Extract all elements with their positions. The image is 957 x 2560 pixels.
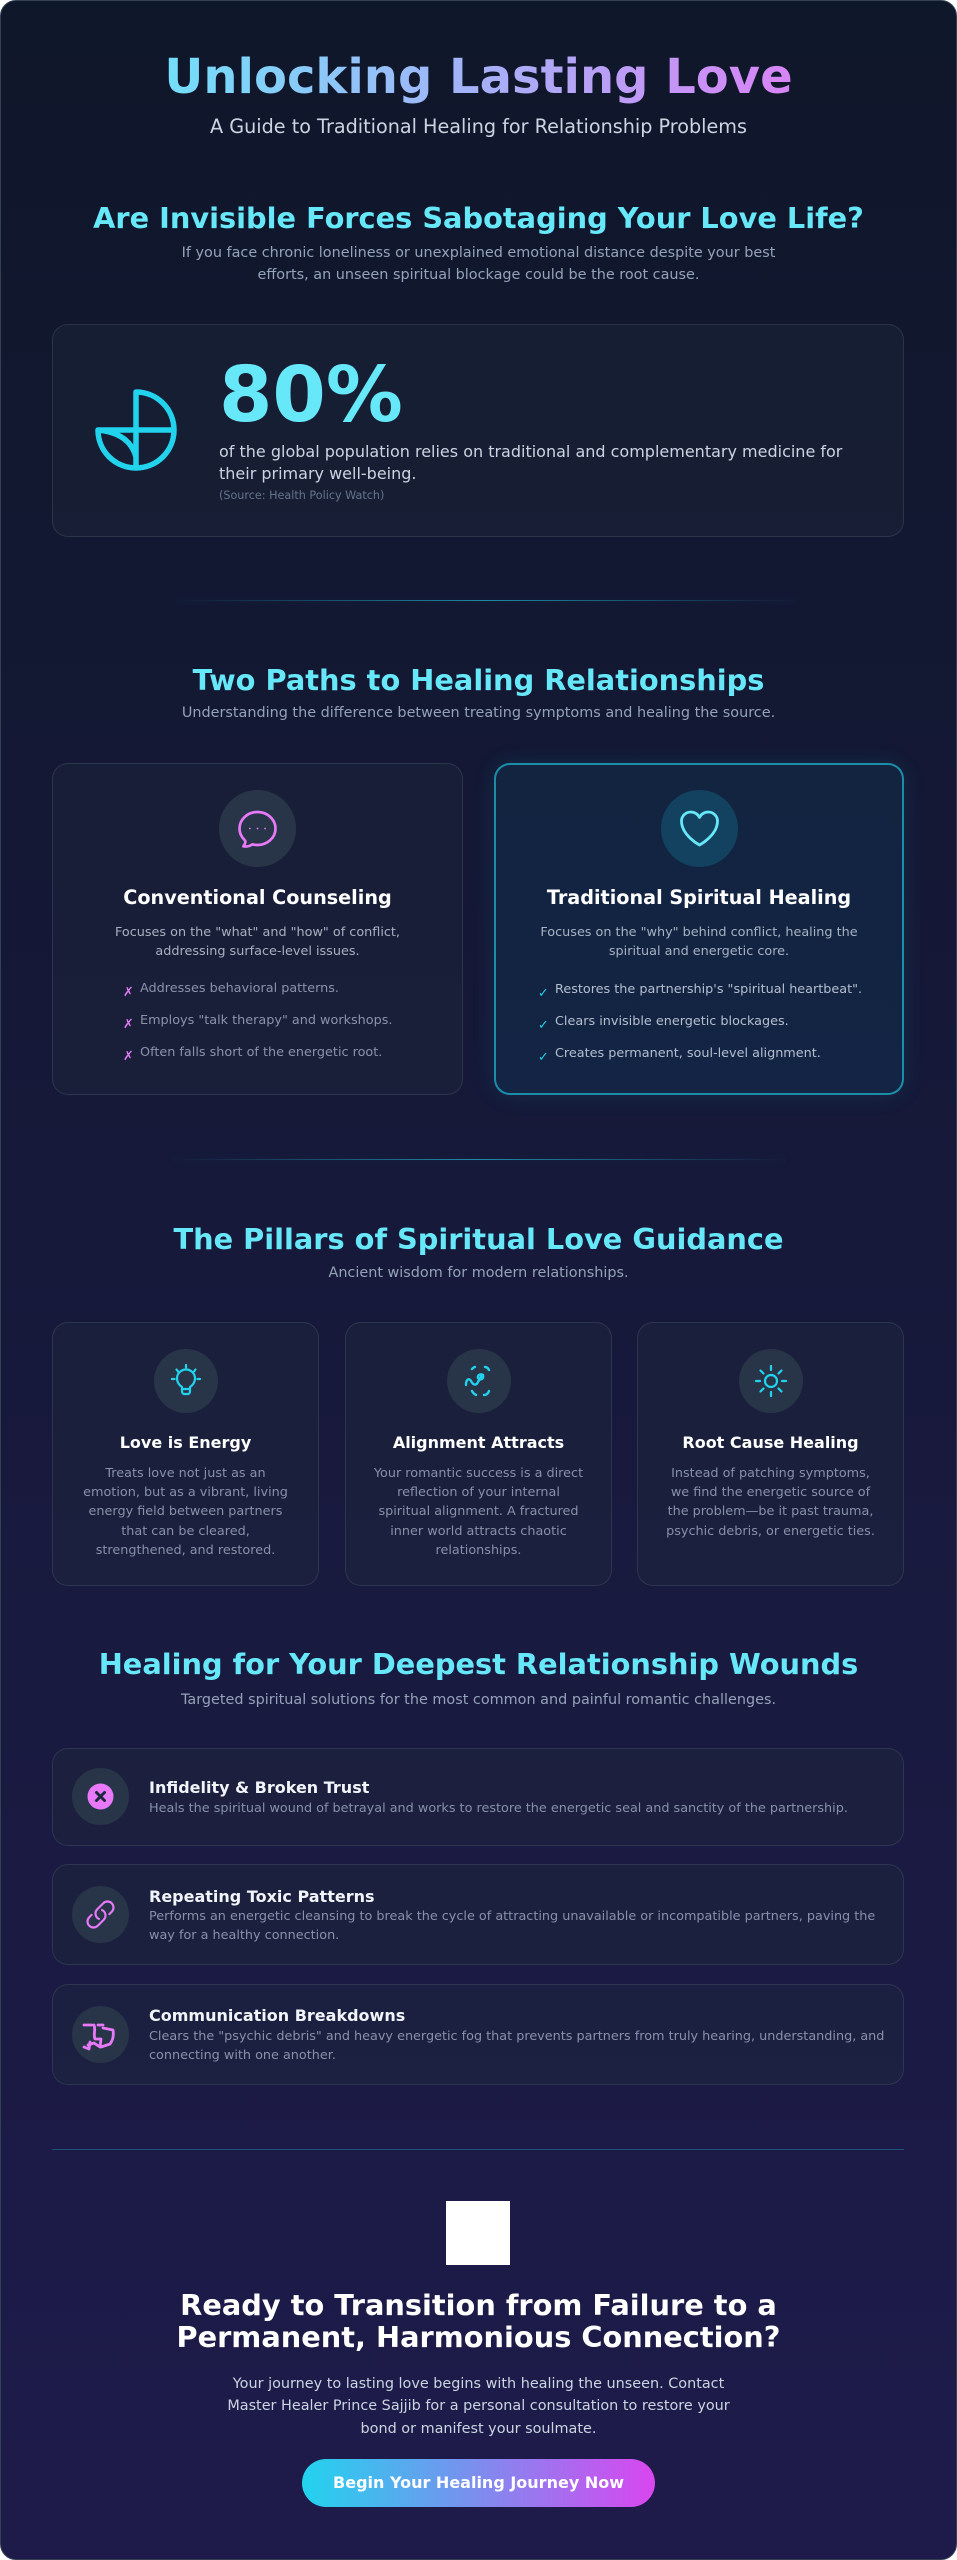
text: statistic description bbox=[219, 442, 842, 483]
heading: root cause healing: Root Cause Healing bbox=[682, 1433, 859, 1452]
heading: invisible forces: Are Invisible Forces Sabotaging Your Love Life? bbox=[93, 201, 864, 235]
text: two paths subtitle: Understanding the difference between treating symptoms and healing the source. bbox=[182, 705, 775, 721]
text: conventional description: Focuses on the "what" and "how" of conflict, bbox=[115, 925, 400, 940]
list: traditional points: ✓ bbox=[538, 1018, 549, 1033]
text: traditional description: spiritual and energetic core. bbox=[609, 944, 789, 959]
heading: communication breakdowns: Communication Breakdowns bbox=[149, 2006, 405, 2025]
text: love is energy description: strengthened, and restored. bbox=[96, 1543, 275, 1558]
statistic: 80%: 80% bbox=[219, 351, 403, 440]
text: communication description: Clears the "psychic debris" and heavy energetic fog that prevents partners from truly hearing, understanding, and bbox=[149, 2029, 884, 2044]
text: toxic patterns description bbox=[149, 1909, 875, 1943]
list: conventional points: Employs "talk therapy" and workshops. bbox=[140, 1013, 392, 1028]
text: love is energy description: that can be cleared, bbox=[121, 1524, 250, 1539]
text: root cause description: we find the energetic source of bbox=[671, 1485, 870, 1500]
text: alignment description bbox=[374, 1466, 583, 1558]
icon: broken speech bubbles bbox=[72, 2006, 129, 2063]
heading: traditional spiritual healing: Traditional Spiritual Healing bbox=[547, 886, 851, 909]
icon: light bulb bbox=[154, 1349, 218, 1413]
text: alignment description: relationships. bbox=[436, 1543, 521, 1558]
text: love is energy description: energy field between partners bbox=[89, 1504, 282, 1519]
text: alignment description: inner world attracts chaotic bbox=[390, 1524, 567, 1539]
text: root cause description: Instead of patching symptoms, bbox=[671, 1466, 870, 1481]
heading: toxic patterns: Repeating Toxic Patterns bbox=[149, 1887, 375, 1906]
text: communication description: connecting with one another. bbox=[149, 2048, 336, 2063]
icon: speech bubble bbox=[219, 790, 296, 867]
icon: pie chart leaf bbox=[95, 389, 177, 471]
heading: love is energy: Love is Energy bbox=[120, 1433, 251, 1452]
panel: conventional counseling bbox=[52, 763, 463, 1095]
icon: white square placeholder bbox=[446, 2201, 510, 2265]
text: alignment description: spiritual alignment. A fractured bbox=[378, 1504, 579, 1519]
text: invisible forces intro bbox=[182, 245, 776, 283]
list: conventional points: ✗ bbox=[123, 985, 134, 1000]
text: pillars subtitle: Ancient wisdom for modern relationships. bbox=[328, 1265, 629, 1281]
heading: wounds: Healing for Your Deepest Relationship Wounds bbox=[99, 1647, 858, 1681]
text: invisible forces intro: If you face chronic loneliness or unexplained emotional distance despite your best bbox=[182, 245, 775, 261]
text: call to action description: Master Healer Prince Sajjib for a personal consultation to restore your bbox=[227, 2398, 730, 2414]
list: traditional points: ✓ bbox=[538, 1050, 549, 1065]
text: root cause description bbox=[666, 1466, 875, 1539]
panel: root cause healing bbox=[637, 1322, 904, 1586]
heading: two paths: Two Paths to Healing Relationships bbox=[193, 663, 764, 697]
list: conventional points bbox=[123, 981, 392, 1064]
list: conventional points: Often falls short of the energetic root. bbox=[140, 1045, 382, 1060]
text: communication description bbox=[149, 2029, 884, 2063]
button: begin healing journey bbox=[302, 2459, 655, 2507]
icon: alignment bbox=[447, 1349, 511, 1413]
panel: toxic patterns bbox=[52, 1864, 904, 1965]
list: traditional points: ✓ bbox=[538, 986, 549, 1001]
icon: sun bbox=[739, 1349, 803, 1413]
text: source: (Source: Health Policy Watch) bbox=[219, 489, 384, 502]
heading: call to action: Permanent, Harmonious Connection? bbox=[176, 2320, 781, 2354]
panel: traditional spiritual healing bbox=[494, 763, 904, 1095]
heading: pillars: The Pillars of Spiritual Love Guidance bbox=[173, 1222, 784, 1256]
text: alignment description: reflection of your internal bbox=[397, 1485, 560, 1500]
heading: alignment attracts: Alignment Attracts bbox=[393, 1433, 564, 1452]
title: Unlocking Lasting Love bbox=[164, 49, 793, 105]
text: invisible forces intro: efforts, an unseen spiritual blockage could be the root cause. bbox=[258, 267, 699, 283]
text: traditional description: Focuses on the "why" behind conflict, healing the bbox=[540, 925, 858, 940]
text: infidelity description: Heals the spiritual wound of betrayal and works to restore the energetic seal and sanctity of the partnership. bbox=[149, 1801, 848, 1816]
text: root cause description: the problem—be it past trauma, bbox=[668, 1504, 873, 1519]
panel: love is energy bbox=[52, 1322, 319, 1586]
text: call to action description: Your journey to lasting love begins with healing the unseen. Contact bbox=[233, 2376, 724, 2392]
text: alignment description: Your romantic success is a direct bbox=[374, 1466, 583, 1481]
icon: heart bbox=[661, 790, 738, 867]
list: conventional points: ✗ bbox=[123, 1017, 134, 1032]
list: traditional points: Creates permanent, soul-level alignment. bbox=[555, 1046, 821, 1061]
text: statistic description: their primary well-being. bbox=[219, 464, 416, 483]
text: conventional description bbox=[115, 925, 400, 959]
text: wounds subtitle: Targeted spiritual solutions for the most common and painful romantic challenges. bbox=[181, 1692, 776, 1708]
text: love is energy description bbox=[83, 1466, 288, 1558]
panel: alignment attracts bbox=[345, 1322, 612, 1586]
icon: x circle bbox=[72, 1768, 129, 1825]
heading: conventional counseling: Conventional Counseling bbox=[123, 886, 392, 909]
heading: infidelity: Infidelity & Broken Trust bbox=[149, 1778, 369, 1797]
panel: communication breakdowns bbox=[52, 1984, 904, 2085]
button: begin healing journey: Begin Your Healing Journey Now bbox=[333, 2473, 624, 2492]
list: conventional points: ✗ bbox=[123, 1049, 134, 1064]
text: call to action description bbox=[227, 2376, 730, 2437]
text: toxic patterns description: Performs an energetic cleansing to break the cycle of attracting unavailable or incompatible partners, paving the bbox=[149, 1909, 875, 1924]
list: traditional points: Restores the partnership's "spiritual heartbeat". bbox=[555, 982, 862, 997]
text: traditional description bbox=[540, 925, 858, 959]
subtitle: A Guide to Traditional Healing for Relationship Problems bbox=[210, 115, 747, 138]
text: conventional description: addressing surface-level issues. bbox=[155, 944, 360, 959]
panel: infidelity bbox=[52, 1748, 904, 1846]
heading: call to action bbox=[176, 2288, 781, 2354]
list: traditional points bbox=[538, 982, 862, 1065]
icon: chain link bbox=[72, 1886, 129, 1943]
text: call to action description: bond or manifest your soulmate. bbox=[361, 2421, 596, 2437]
text: love is energy description: Treats love not just as an bbox=[105, 1466, 266, 1481]
text: toxic patterns description: way for a healthy connection. bbox=[149, 1928, 339, 1943]
list: conventional points: Addresses behavioral patterns. bbox=[140, 981, 339, 996]
heading: call to action: Ready to Transition from Failure to a bbox=[180, 2288, 777, 2322]
text: statistic description: of the global population relies on traditional and complementary medicine for bbox=[219, 442, 842, 461]
panel: 80 percent statistic bbox=[52, 324, 904, 537]
text: love is energy description: emotion, but as a vibrant, living bbox=[83, 1485, 288, 1500]
list: traditional points: Clears invisible energetic blockages. bbox=[555, 1014, 789, 1029]
text: root cause description: psychic debris, or energetic ties. bbox=[666, 1524, 875, 1539]
